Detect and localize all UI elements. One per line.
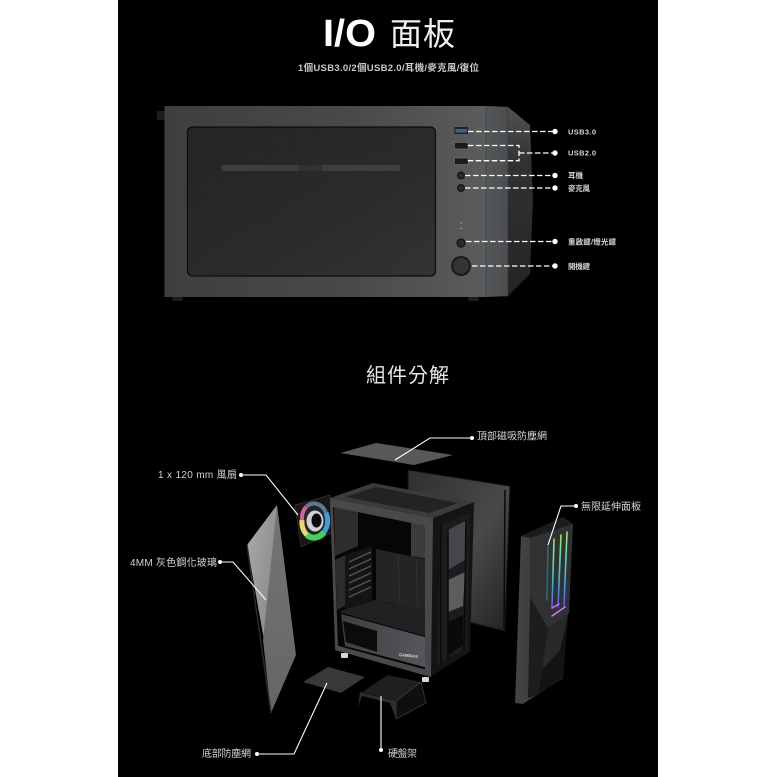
case side view <box>157 106 533 301</box>
case body <box>164 106 486 297</box>
brand mark: GAMDIAS <box>399 652 419 659</box>
reset button <box>457 239 465 247</box>
tempered glass panel <box>247 505 296 713</box>
port labels: 麥克風 <box>568 183 590 193</box>
component labels: 4MM 灰色鋼化玻璃 <box>130 556 217 569</box>
leader dots <box>218 436 578 756</box>
dark facet <box>528 597 548 698</box>
rear side panel <box>408 470 510 631</box>
title: I/O panel: 面板 <box>390 16 456 52</box>
LED strips <box>547 532 567 616</box>
chassis interior <box>333 503 431 677</box>
left mesh upper <box>334 505 358 556</box>
panel top face <box>521 517 573 538</box>
black content panel <box>118 0 658 777</box>
lit facet <box>530 524 573 628</box>
component labels: 無限延伸面板 <box>581 500 641 513</box>
component labels: 1 x 120 mm 風扇 <box>158 469 237 481</box>
title: I/O panel: I/O <box>323 13 376 55</box>
port labels: 耳機 <box>568 170 584 180</box>
glass mesh window <box>188 127 436 276</box>
I/O ports <box>451 127 471 276</box>
chassis top <box>330 483 474 518</box>
port labels: 開機鍵 <box>568 261 590 271</box>
callout dots <box>552 129 558 269</box>
LED pinholes <box>460 222 462 229</box>
heading: exploded view: 組件分解 <box>366 364 450 387</box>
front panel side facet <box>508 107 533 296</box>
title: I/O panel <box>323 13 456 55</box>
bottom dust filter <box>303 667 365 693</box>
port labels: 重啟鍵/燈光鍵 <box>568 236 616 246</box>
feet <box>341 653 429 682</box>
subtitle: port list: 1個USB3.0/2個USB2.0/耳機/麥克風/復位 <box>298 62 479 74</box>
PSU shroud top <box>340 600 428 637</box>
callout lines for I/O ports <box>465 132 555 266</box>
lower patterned facet <box>538 615 568 695</box>
front strip <box>486 106 508 297</box>
chassis side with frame <box>430 502 474 677</box>
port labels <box>568 128 616 271</box>
leader lines for exploded view <box>220 438 576 754</box>
USB3.0 port <box>454 127 468 134</box>
upper right grey cutout <box>411 517 428 559</box>
motherboard tray <box>376 549 428 612</box>
component labels: 底部防塵網 <box>202 747 251 760</box>
infinity mirror front panel <box>515 517 573 704</box>
top magnetic dust filter <box>340 443 453 465</box>
chassis front frame <box>330 498 433 677</box>
component labels: 硬盤架 <box>388 747 417 760</box>
port labels: USB3.0 <box>568 128 596 136</box>
power button <box>451 256 471 276</box>
component labels <box>130 430 641 760</box>
USB2.0 ports <box>454 142 468 164</box>
PSU shroud front <box>341 614 428 668</box>
case feet and handle <box>157 111 479 301</box>
port labels: USB2.0 <box>568 148 596 158</box>
component labels: 頂部磁吸防塵網 <box>477 430 547 442</box>
chassis <box>330 483 474 682</box>
RGB fan <box>295 495 332 547</box>
audio jacks <box>458 172 464 191</box>
exploded case diagram <box>247 443 573 719</box>
hard drive bracket <box>358 675 426 719</box>
